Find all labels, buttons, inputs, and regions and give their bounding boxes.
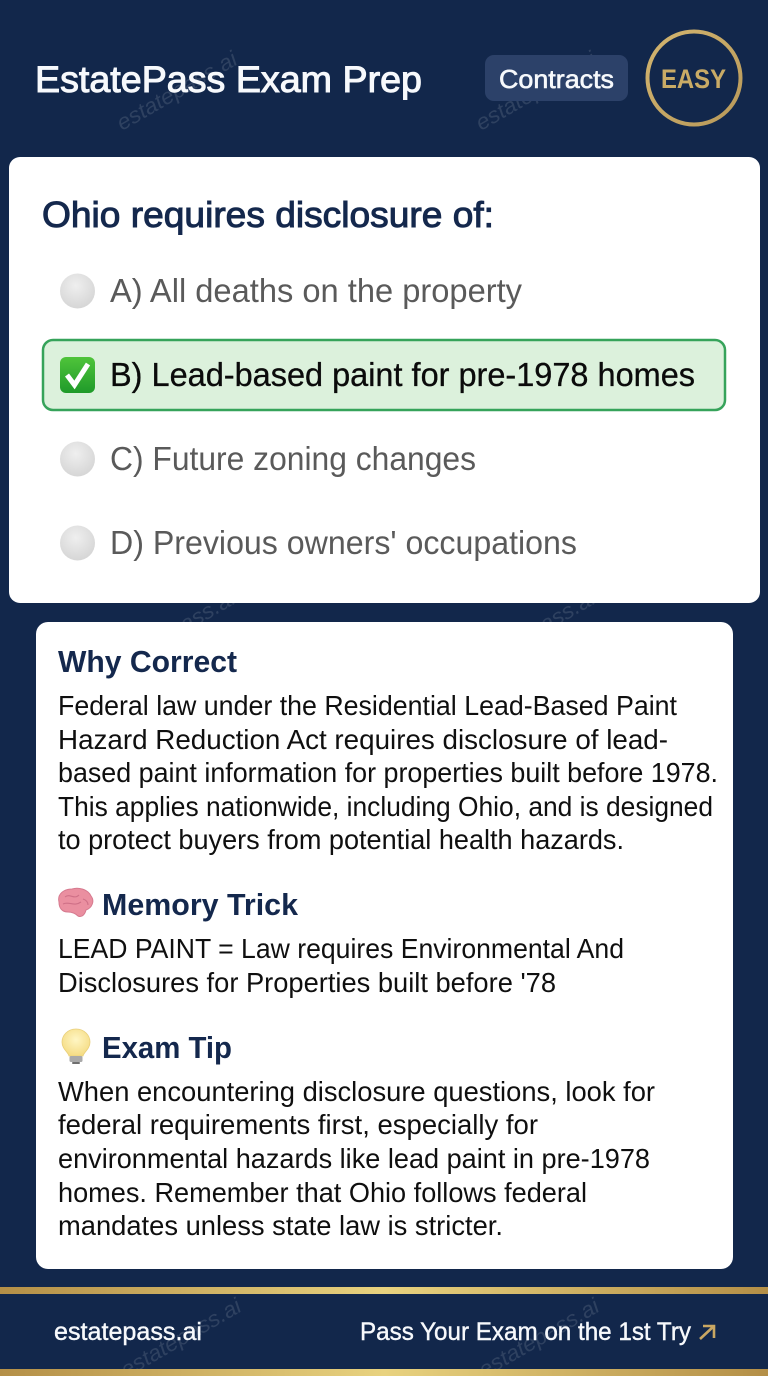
text: exam tip — [58, 1076, 655, 1241]
icon: green check mark — [60, 357, 95, 393]
watermarks: estatepass.ai — [110, 585, 240, 674]
category badge: Contracts: Contracts — [499, 64, 614, 94]
option C: C) Future zoning changes — [110, 440, 476, 477]
option D: D) Previous owners' occupations — [110, 524, 577, 561]
watermarks: estatepass.ai — [470, 585, 600, 674]
text: memory trick: Disclosures for Properties built before '78 — [58, 967, 556, 998]
text: why correct explanation: Federal law under the Residential Lead-Based Paint — [58, 690, 677, 721]
header — [35, 32, 740, 124]
text: exam tip: When encountering disclosure questions, look for — [58, 1076, 655, 1107]
icon: gold arrow — [700, 1326, 714, 1339]
title: EstatePass Exam Prep — [35, 59, 422, 100]
icon: brain — [59, 888, 93, 917]
difficulty badge: EASY: EASY — [661, 64, 726, 94]
text: why correct explanation — [58, 690, 718, 855]
text: exam tip: environmental hazards like lead paint in pre-1978 — [58, 1143, 650, 1174]
difficulty badge: EASY — [648, 32, 740, 124]
option A: A) All deaths on the property — [110, 272, 522, 309]
text: exam tip: homes. Remember that Ohio follows federal — [58, 1177, 587, 1208]
watermarks: estatepass.ai — [112, 46, 242, 135]
heading: Why Correct: Why Correct — [58, 644, 237, 679]
gold bar: bottom — [0, 1369, 768, 1376]
heading: Exam Tip: Exam Tip — [102, 1030, 232, 1065]
text: why correct explanation: This applies nationwide, including Ohio, and is designed — [58, 791, 713, 822]
text: memory trick — [58, 933, 624, 998]
panel: question — [9, 157, 760, 603]
text: exam tip: mandates unless state law is stricter. — [58, 1210, 503, 1241]
watermarks: estatepass.ai — [471, 46, 601, 135]
footer — [0, 1287, 768, 1376]
text: why correct explanation: Hazard Reduction Act requires disclosure of lead- — [58, 724, 668, 755]
footer site name: estatepass.ai — [54, 1318, 202, 1346]
question heading: Ohio requires disclosure of: — [42, 194, 494, 235]
text: memory trick: LEAD PAINT = Law requires Environmental And — [58, 933, 624, 964]
option B: correct answer — [43, 340, 725, 410]
panel: explanation — [36, 622, 733, 1269]
category badge: Contracts — [485, 55, 628, 101]
footer tagline: Pass Your Exam on the 1st Try — [360, 1318, 691, 1346]
text: why correct explanation: based paint information for properties built before 1978. — [58, 757, 718, 788]
heading: Memory Trick: Memory Trick — [102, 887, 299, 922]
text: exam tip: federal requirements first, especially for — [58, 1109, 538, 1140]
text: why correct explanation: to protect buyers from potential health hazards. — [58, 824, 624, 855]
icon: light bulb — [62, 1029, 90, 1064]
option B: correct answer: B) Lead-based paint for pre-1978 homes — [110, 356, 695, 393]
watermarks — [110, 46, 604, 1376]
gold bar: top — [0, 1287, 768, 1294]
